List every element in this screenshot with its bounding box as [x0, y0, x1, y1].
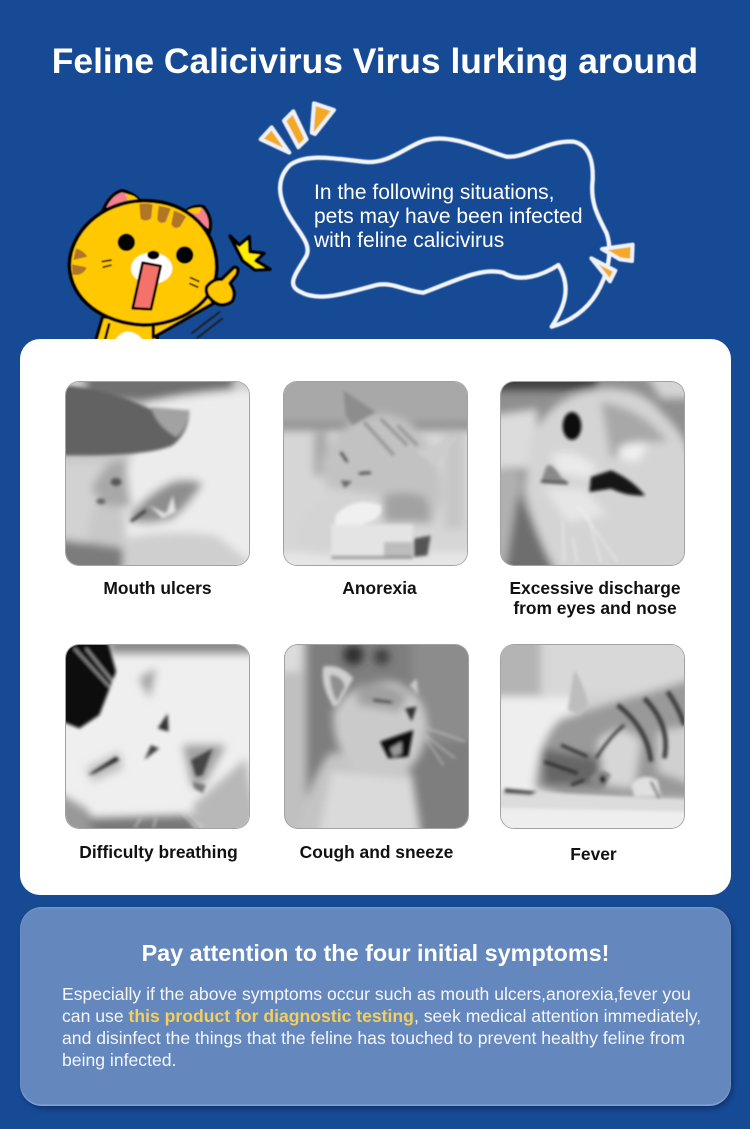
panel body text: can use this product for diagnostic testing, seek medical attention immediately, [62, 1006, 701, 1026]
speech bubble text: with feline calicivirus [314, 229, 504, 252]
icon: cartoon cat mascot [66, 188, 272, 339]
label: cough and sneeze: Cough and sneeze [300, 842, 453, 862]
speech bubble [258, 100, 636, 330]
photo: excessive discharge [501, 382, 684, 565]
photo: cough and sneeze [285, 645, 468, 828]
panel: symptoms card [20, 339, 731, 895]
panel body text: being infected. [62, 1050, 176, 1070]
label: excessive discharge: Excessive discharge [509, 578, 681, 598]
panel heading: Pay attention to the four initial symptoms! [142, 940, 609, 966]
bubble outline [280, 139, 609, 327]
photo: difficulty breathing [66, 645, 249, 828]
speech bubble text: In the following situations, [314, 181, 554, 204]
speech bubble text: pets may have been infected [314, 205, 583, 228]
photo: mouth ulcers [66, 382, 249, 565]
label: anorexia: Anorexia [342, 578, 417, 598]
title: Feline Calicivirus Virus lurking around [52, 41, 698, 81]
panel body text: Especially if the above symptoms occur such as mouth ulcers,anorexia,fever you [62, 984, 691, 1004]
panel body text: and disinfect the things that the feline has touched to prevent healthy feline from [62, 1028, 685, 1048]
speech bubble text [314, 181, 583, 252]
photo: anorexia [284, 382, 467, 565]
orange burst marks [261, 103, 633, 281]
label: excessive discharge: from eyes and nose [513, 598, 677, 618]
label: mouth ulcers: Mouth ulcers [103, 578, 212, 598]
panel: four initial symptoms [20, 907, 731, 1106]
label: difficulty breathing: Difficulty breathing [79, 842, 238, 862]
photo: fever [501, 645, 684, 828]
label: excessive discharge [509, 578, 681, 618]
panel body text [62, 984, 701, 1070]
label: fever: Fever [570, 844, 617, 864]
